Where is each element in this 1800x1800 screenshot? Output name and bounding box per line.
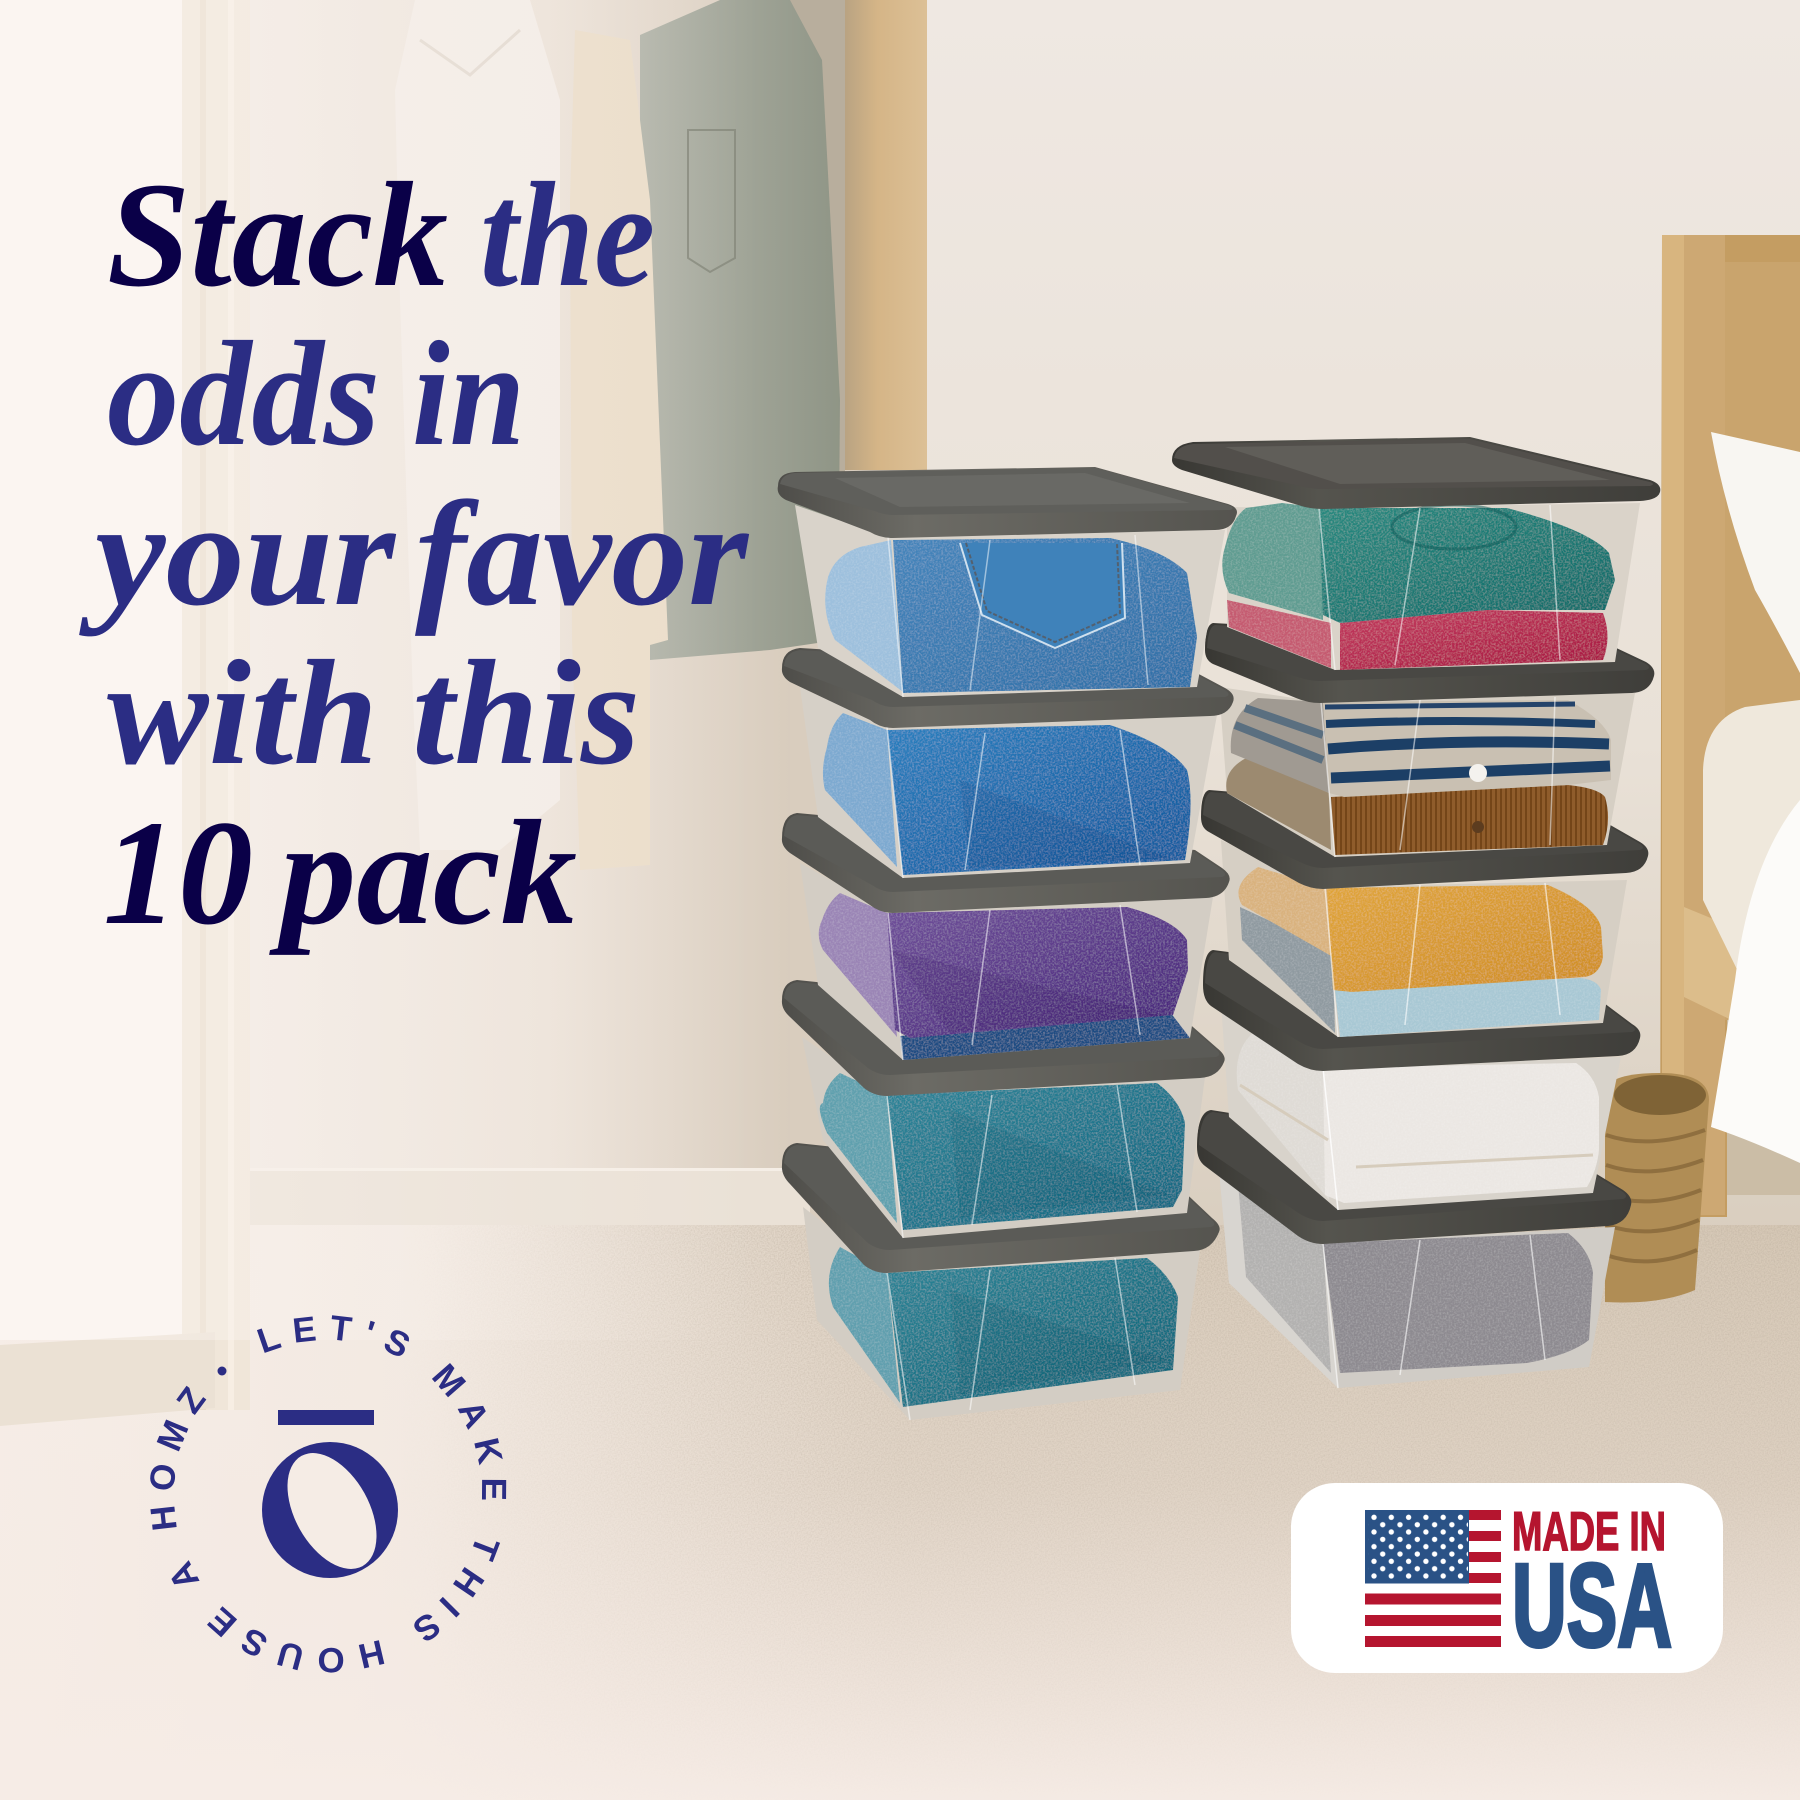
logo ring letter: [262, 1438, 398, 1584]
bed and basket: [1605, 235, 1800, 1302]
headline line 4: with: [107, 630, 378, 796]
american flag: [1365, 1510, 1501, 1647]
headline line 1: the: [480, 152, 655, 318]
headline line 4: this: [412, 630, 640, 796]
bin 1: denim jeans: [778, 467, 1237, 697]
bin 4: teal blanket: [782, 980, 1225, 1238]
bin 2: blue fleece: [782, 648, 1234, 878]
headline line 5: pack: [269, 790, 577, 956]
headline line 3: your: [78, 471, 397, 637]
right stack of five bins: [1172, 437, 1660, 1388]
separator dot: [218, 1366, 226, 1376]
circular tagline: LET'S MAKE THIS HOUSE A HOMZ: [150, 1315, 506, 1673]
headline line 2: odds: [107, 311, 380, 477]
bin 10: grey blanket: [1197, 1110, 1631, 1388]
bin 8: yellow and light blue: [1201, 790, 1648, 1037]
headline line 2: in: [412, 311, 525, 477]
headline line 1: Stack: [107, 152, 448, 318]
logo macron bar: [278, 1410, 374, 1425]
USA text: USA: [1512, 1540, 1672, 1672]
bin 5: teal blanket: [782, 1143, 1220, 1420]
bin 6: teal and red sweaters: [1172, 437, 1660, 670]
headline line 3: favor: [415, 471, 750, 637]
bin 3: purple and navy: [782, 813, 1230, 1060]
bin 9: white towels: [1203, 950, 1640, 1210]
made in text: MADE IN: [1512, 1500, 1666, 1562]
hanging clothes: [395, 0, 927, 870]
brand logo seal: [150, 1315, 506, 1673]
made in USA badge: [1291, 1483, 1723, 1673]
left stack of five bins: [778, 467, 1237, 1420]
jeans pocket: [960, 543, 1125, 648]
headline: [78, 152, 750, 956]
left fade overlay: [0, 0, 760, 1340]
headline line 5: 10: [103, 790, 253, 956]
door frame: [0, 0, 250, 1426]
bin 7: striped and brown cardigans: [1205, 623, 1654, 857]
